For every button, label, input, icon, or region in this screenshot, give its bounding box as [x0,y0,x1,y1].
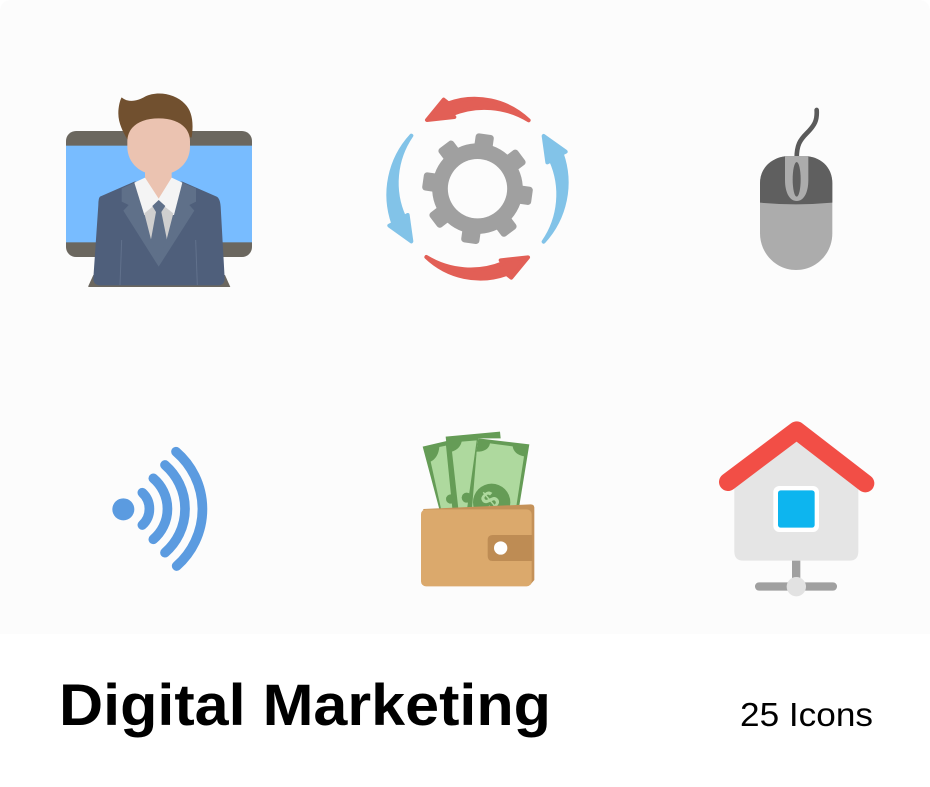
title: Digital Marketing [59,673,551,738]
banknotes [423,432,529,521]
icon: networked home [728,430,865,596]
banknotes: $ [475,484,506,517]
blue arrows [388,136,567,242]
icon: wallet with banknotes [421,432,534,586]
icon: computer mouse [760,110,832,270]
red arrows [426,99,529,279]
icon: gear with cycle arrows [388,99,567,279]
icon count label: 25 Icons [740,696,873,733]
icon: wireless signal waves [112,452,202,566]
gear [415,127,540,251]
wallet body [423,504,534,585]
icon: businessman in front of monitor [66,94,252,287]
